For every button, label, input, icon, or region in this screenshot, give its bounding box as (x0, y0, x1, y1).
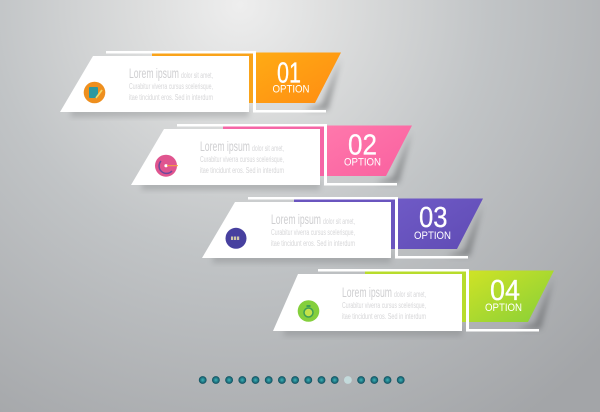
option label: OPTION (485, 302, 522, 314)
option label: OPTION (414, 230, 451, 242)
text block: Lorem ipsum (271, 211, 321, 227)
text block: Curabitur viverra cursus scelerisque, (342, 301, 426, 310)
text block: dolor sit amet, (252, 144, 284, 153)
white outline (106, 51, 326, 112)
white card (202, 202, 391, 258)
panel: option 4 (273, 269, 554, 336)
option label: OPTION (344, 157, 381, 169)
option tab (469, 270, 554, 322)
text block: Lorem ipsum (129, 65, 179, 81)
text block: dolor sit amet, (323, 217, 355, 226)
text block: itae tincidunt eros. Sed in interdum (129, 93, 213, 102)
text block: Lorem ipsum (200, 138, 250, 154)
text block: dolor sit amet, (181, 71, 213, 80)
text block (342, 284, 426, 321)
option tab (398, 198, 483, 249)
white card (60, 56, 249, 112)
text block: dolor sit amet, (394, 290, 426, 299)
option label: OPTION (272, 84, 310, 96)
text block (129, 65, 213, 102)
accent bracket (365, 272, 466, 322)
text block: itae tincidunt eros. Sed in interdum (271, 239, 355, 248)
text block: Curabitur viverra cursus scelerisque, (200, 155, 284, 164)
number: 01 (277, 58, 301, 90)
text block: Curabitur viverra cursus scelerisque, (271, 228, 355, 237)
accent bracket (223, 126, 324, 176)
white outline (248, 197, 468, 258)
text block (200, 138, 284, 175)
icon: target (155, 155, 178, 177)
text block (271, 211, 355, 248)
panel: option 3 (202, 197, 483, 263)
text block: Curabitur viverra cursus scelerisque, (129, 82, 213, 91)
number: 02 (348, 130, 377, 162)
number: 03 (419, 202, 448, 234)
panel: option 1 (60, 51, 341, 117)
icon: notepad and pencil (84, 82, 105, 103)
white card (131, 129, 320, 185)
option tab (256, 52, 341, 103)
accent bracket (152, 54, 253, 103)
icon: bars (226, 228, 246, 249)
accent bracket (294, 200, 395, 249)
white outline (177, 124, 397, 186)
option tab (327, 126, 412, 176)
panel: option 2 (131, 124, 412, 190)
number: 04 (490, 275, 520, 307)
text block: itae tincidunt eros. Sed in interdum (200, 166, 284, 175)
white outline (318, 269, 539, 332)
text block: Lorem ipsum (342, 284, 392, 300)
text block: itae tincidunt eros. Sed in interdum (342, 312, 426, 321)
icon: stopwatch (298, 300, 319, 322)
white card (273, 274, 462, 331)
icon row (199, 376, 405, 384)
